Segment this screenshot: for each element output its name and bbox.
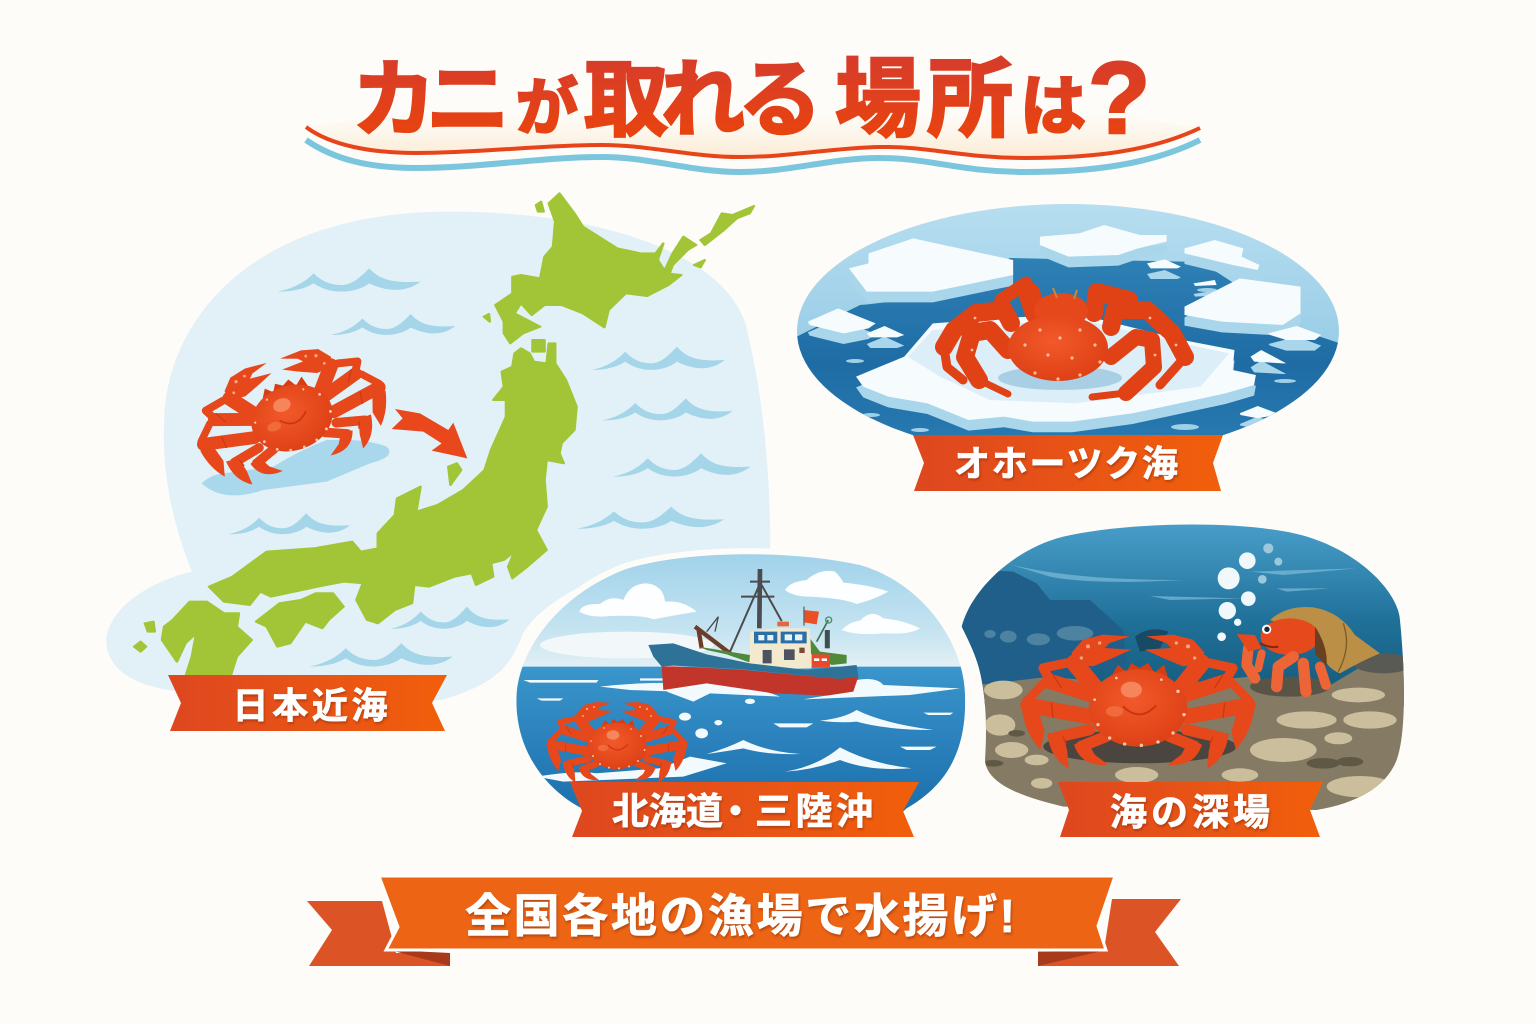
label: 海の深場: 海の深場 bbox=[1110, 792, 1270, 833]
bottom ribbon bbox=[307, 876, 1181, 966]
label: 海の深場 bbox=[1058, 782, 1323, 837]
ocean scene bbox=[797, 204, 1339, 436]
pebbles bbox=[984, 681, 1397, 797]
bubbles bbox=[1217, 552, 1256, 641]
title underline waves bbox=[306, 110, 1200, 172]
panel: 海の深場 bbox=[950, 520, 1420, 837]
Kuril islands bbox=[484, 202, 754, 322]
label: 北海道・三陸沖: ・ bbox=[717, 791, 754, 832]
wave crests bbox=[523, 678, 960, 782]
label: 日本近海 bbox=[168, 675, 447, 731]
ripples bbox=[846, 288, 1296, 432]
panel: 北海道・三陸沖 bbox=[510, 550, 970, 840]
label: オホーツク海: オホーツク海 bbox=[954, 443, 1178, 484]
title text: は bbox=[1020, 69, 1086, 143]
underwater rocks bbox=[962, 570, 1127, 687]
white border bbox=[516, 554, 965, 837]
Hokkaido bbox=[495, 193, 681, 343]
Honshu bbox=[209, 343, 577, 623]
title text: 取れる bbox=[584, 53, 822, 147]
arrow to map bbox=[392, 409, 467, 458]
panel: 日本近海 map bbox=[106, 193, 770, 731]
Shikoku bbox=[256, 593, 344, 647]
Sado island bbox=[448, 463, 461, 485]
title bbox=[306, 41, 1200, 172]
scene traced group bbox=[516, 548, 966, 812]
map traced group bbox=[106, 193, 770, 701]
ribbon right tail bbox=[1038, 899, 1181, 966]
deep sea scene bbox=[962, 524, 1404, 810]
clouds bbox=[579, 571, 920, 634]
label: 北海道・三陸沖 bbox=[570, 782, 919, 837]
light streaks bbox=[1007, 563, 1357, 600]
ice floes bbox=[808, 225, 1321, 432]
sea and sky scene bbox=[516, 554, 966, 812]
ribbon text: 全国各地の漁場で水揚げ! bbox=[465, 890, 1015, 942]
icon: deep sea crab bbox=[1022, 635, 1254, 769]
icon: crab in the sea bbox=[547, 702, 687, 782]
label: 北海道・三陸沖: 北海道 bbox=[612, 791, 723, 832]
ribbon main band bbox=[379, 876, 1115, 950]
crab shadow bbox=[202, 440, 389, 495]
map sea background bbox=[106, 212, 770, 701]
Kyushu bbox=[162, 602, 252, 677]
title text: が bbox=[516, 74, 578, 143]
label: 日本近海: 日本近海 bbox=[232, 685, 388, 726]
icon: fishing boat bbox=[648, 569, 858, 696]
icon: crab on map bbox=[180, 329, 400, 497]
Japan map bbox=[134, 193, 754, 677]
sea waves bbox=[228, 268, 750, 667]
scene traced group bbox=[962, 524, 1404, 810]
panel: オホーツク海 bbox=[790, 200, 1350, 491]
icon: hermit crab bbox=[1237, 607, 1380, 692]
seabed bbox=[982, 661, 1404, 810]
label: 北海道・三陸沖: 三陸沖 bbox=[755, 791, 873, 832]
icon: king crab on ice bbox=[944, 283, 1185, 397]
label: オホーツク海 bbox=[913, 435, 1223, 491]
title text: ? bbox=[1088, 41, 1150, 155]
title text: 場所 bbox=[835, 52, 1013, 148]
title text: カニ bbox=[352, 53, 510, 147]
ribbon left tail bbox=[307, 901, 450, 966]
